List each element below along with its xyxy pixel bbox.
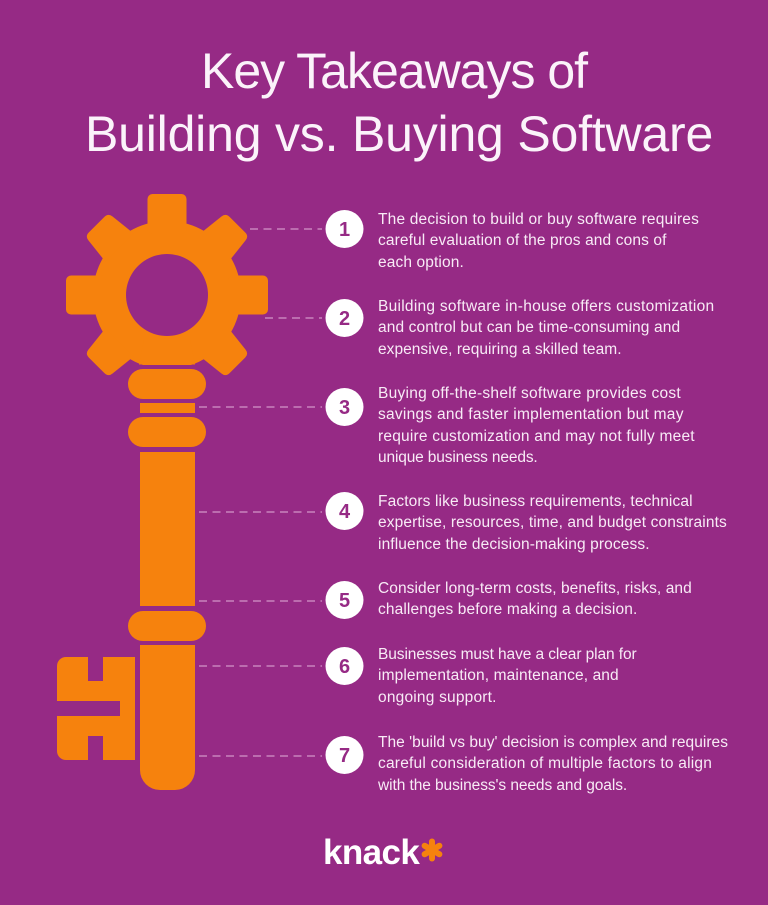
key gear head bbox=[66, 194, 268, 379]
title bbox=[85, 43, 713, 162]
takeaway 3 bbox=[378, 385, 695, 466]
badge 1 bbox=[326, 210, 364, 248]
takeaway 4 bbox=[378, 493, 727, 553]
badge 5 bbox=[326, 581, 364, 619]
title: Building vs. Buying Software bbox=[85, 106, 713, 162]
takeaway 3: Buying off-the-shelf software provides cost bbox=[378, 385, 681, 402]
takeaway 2: and control but can be time-consuming and bbox=[378, 319, 680, 336]
takeaway 2 bbox=[378, 298, 714, 358]
takeaway 1 bbox=[378, 211, 699, 271]
takeaway 4: influence the decision-making process. bbox=[378, 536, 650, 553]
title: Key Takeaways of bbox=[201, 43, 587, 99]
badge 2 bbox=[326, 299, 364, 337]
badge 7 bbox=[326, 736, 364, 774]
takeaway 3: savings and faster implementation but may bbox=[378, 406, 684, 423]
takeaway 5: Consider long-term costs, benefits, risks, and bbox=[378, 580, 692, 597]
icon: key bbox=[57, 194, 268, 790]
takeaway 6: implementation, maintenance, and bbox=[378, 667, 619, 684]
badge 3: 3 bbox=[339, 397, 350, 419]
takeaway 5 bbox=[378, 580, 692, 618]
takeaway 1: careful evaluation of the pros and cons of bbox=[378, 232, 667, 249]
takeaway 4: expertise, resources, time, and budget constraints bbox=[378, 514, 727, 531]
takeaway 7 bbox=[378, 734, 728, 794]
takeaway 6: Businesses must have a clear plan for bbox=[378, 646, 637, 663]
takeaway 7: with the business's needs and goals. bbox=[378, 777, 627, 794]
badge 6 bbox=[326, 647, 364, 685]
takeaway 1: The decision to build or buy software requires bbox=[378, 211, 699, 228]
connector lines bbox=[199, 229, 322, 756]
badge 7: 7 bbox=[339, 745, 350, 767]
takeaway 3: unique business needs. bbox=[378, 449, 538, 466]
badge 6: 6 bbox=[339, 656, 350, 678]
number badges bbox=[326, 210, 364, 774]
badge 5: 5 bbox=[339, 590, 350, 612]
takeaway 2: Building software in-house offers customization bbox=[378, 298, 714, 315]
key collars bbox=[128, 369, 206, 447]
takeaway 5: challenges before making a decision. bbox=[378, 601, 637, 618]
takeaway 3: require customization and may not fully meet bbox=[378, 428, 695, 445]
badge 1: 1 bbox=[339, 219, 350, 241]
badge 2: 2 bbox=[339, 308, 350, 330]
key shaft bbox=[128, 452, 206, 790]
takeaway 7: careful consideration of multiple factors to align bbox=[378, 755, 712, 772]
takeaway 7: The 'build vs buy' decision is complex and requires bbox=[378, 734, 728, 751]
key bit bbox=[57, 657, 135, 760]
takeaway 4: Factors like business requirements, technical bbox=[378, 493, 693, 510]
takeaway 1: each option. bbox=[378, 254, 464, 271]
badge 4: 4 bbox=[339, 501, 351, 523]
badge 3 bbox=[326, 388, 364, 426]
takeaway 6: ongoing support. bbox=[378, 689, 497, 706]
badge 4 bbox=[326, 492, 364, 530]
takeaway 6 bbox=[378, 646, 637, 706]
takeaway 2: expensive, requiring a skilled team. bbox=[378, 341, 622, 358]
logo: knack: knack bbox=[323, 833, 419, 872]
icon: orange asterisk bbox=[422, 838, 442, 862]
